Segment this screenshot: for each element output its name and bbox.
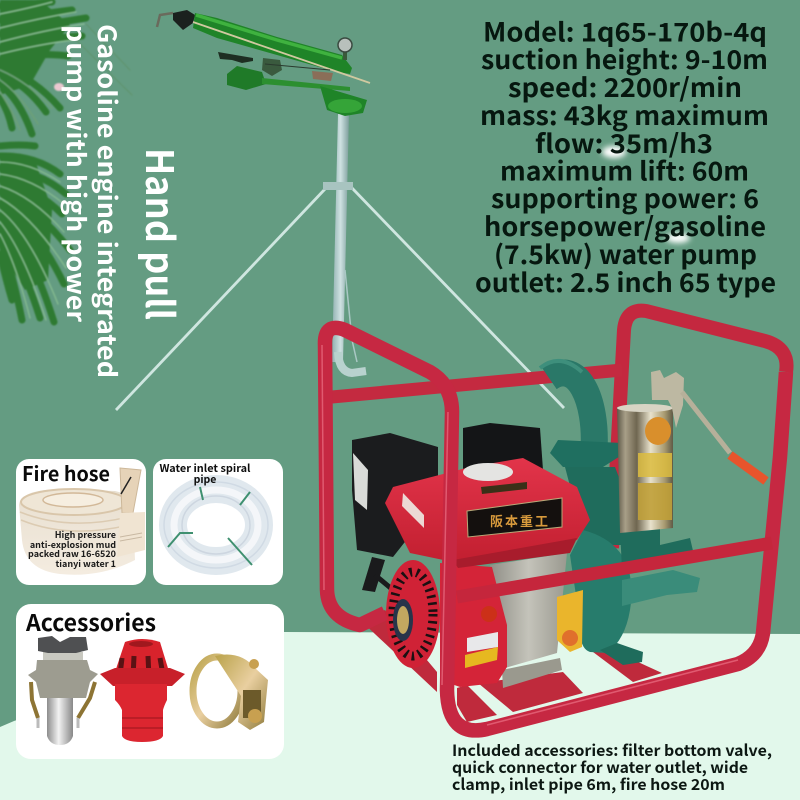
specifications text: flow: 35m/h3 [535, 124, 713, 161]
water pump assembly [322, 311, 787, 730]
specifications text: horsepower/gasoline [484, 207, 766, 244]
flange [550, 440, 625, 467]
included accessories text [452, 739, 772, 795]
specifications text: supporting power: 6 [491, 179, 759, 216]
specifications text [475, 12, 776, 300]
yellow tag [557, 590, 583, 652]
heading: Accessories [25, 604, 156, 638]
top cross rail [332, 370, 622, 397]
heading: pipe [194, 472, 216, 487]
pole hook [338, 352, 366, 373]
icon: quick connector [28, 636, 98, 745]
icon: spiral pipe coil [164, 482, 268, 568]
icon: wide clamp [193, 654, 268, 730]
hose specification: packed raw 16-6520 [28, 547, 116, 560]
heading: Water inlet spiral [160, 461, 251, 476]
icon: filter bottom valve [100, 639, 185, 742]
lower cross rail [457, 543, 772, 597]
front frame highlight [322, 345, 738, 725]
specifications text: outlet: 2.5 inch 65 type [475, 263, 776, 300]
pump handle [651, 370, 766, 481]
hose specification: High pressure [55, 528, 116, 541]
hose specification [28, 528, 116, 570]
included accessories text: clamp, inlet pipe 6m, fire hose 20m [452, 773, 725, 795]
priming cylinder [617, 404, 673, 533]
rear frame tube [612, 311, 787, 548]
recoil starter [386, 560, 440, 668]
heading: Fire hose [22, 458, 110, 487]
brace collar [323, 182, 353, 190]
specifications text: maximum lift: 60m [500, 152, 749, 188]
specifications text: mass: 43kg maximum [480, 96, 769, 133]
panel: fire hose [16, 458, 146, 585]
specifications text: suction height: 9-10m [481, 40, 768, 77]
fuel tank [385, 458, 590, 568]
left brace [116, 188, 326, 410]
hose specification: anti-explosion mud [30, 538, 116, 551]
panel: accessories [16, 604, 284, 759]
outlet pipe [622, 570, 700, 606]
rotated text: product description: Gasoline engine integrated [90, 24, 126, 378]
black kick stand [362, 557, 385, 592]
pump body [540, 361, 700, 665]
hose specification: tianyi water 1 [56, 557, 116, 570]
specifications text: (7.5kw) water pump [494, 235, 757, 272]
panel: water inlet spiral pipe [153, 459, 283, 585]
engine crankcase [440, 553, 583, 688]
rotated text: product description [59, 24, 126, 378]
sprinkler gun on pole [116, 10, 564, 410]
sprinkler head [157, 10, 370, 116]
rotated text: product description: pump with high power [59, 25, 95, 322]
air filter [352, 423, 543, 592]
front frame tube [325, 328, 786, 730]
engine nameplate: 阪本重工 [490, 511, 548, 530]
heading [160, 461, 251, 487]
rotated heading: hand pull: Hand pull [135, 148, 190, 320]
engine nameplate [467, 498, 562, 537]
right brace [352, 188, 564, 408]
included accessories text: quick connector for water outlet, wide [452, 756, 748, 778]
included accessories text: Included accessories: filter bottom valve, [452, 739, 772, 761]
suction elbow [549, 373, 594, 450]
icon: fire hose coil [19, 468, 145, 575]
floor [0, 632, 800, 800]
specifications text: speed: 2200r/min [508, 68, 742, 105]
volute [570, 530, 631, 653]
icon: palm leaves [0, 0, 132, 322]
support pole [332, 114, 349, 362]
base plate [360, 610, 662, 722]
specifications text: Model: 1q65-170b-4q [483, 12, 767, 50]
